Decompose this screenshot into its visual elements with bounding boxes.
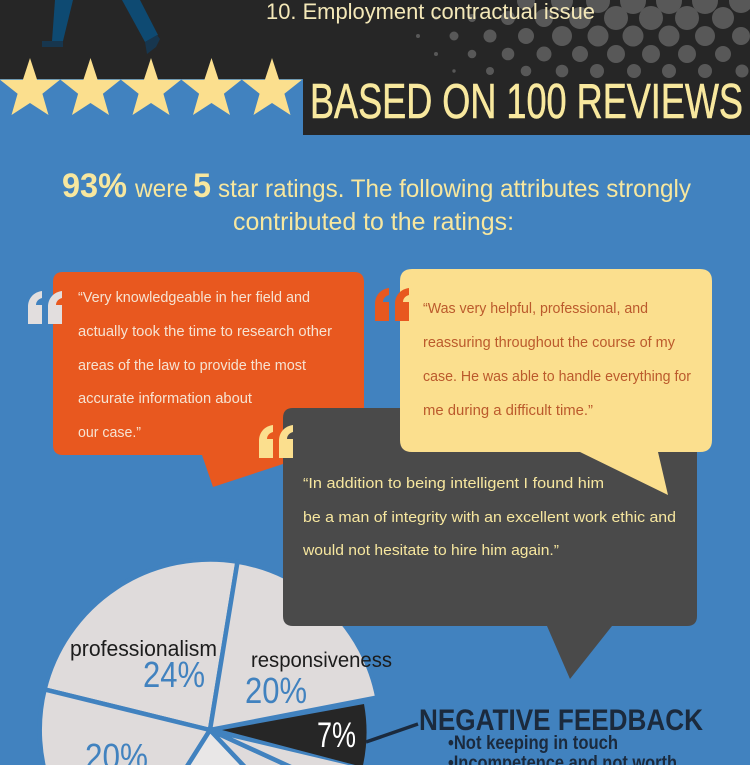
summary statement: contributed to the ratings: <box>233 208 514 236</box>
pie label: professionalism: professionalism <box>70 636 217 661</box>
pie chart <box>40 559 377 765</box>
speech bubble: yellow: me during a difficult time.” <box>423 402 593 419</box>
negative feedback block: NEGATIVE FEEDBACK <box>419 704 703 737</box>
icon: white quote mark <box>28 291 62 324</box>
five star rating <box>0 58 302 115</box>
speech bubble: grey: be a man of integrity with an excellent work ethic and <box>303 509 676 526</box>
summary statement: 5 <box>193 167 211 205</box>
summary statement: 93% <box>62 167 127 205</box>
speech bubble: orange <box>53 272 364 487</box>
speech bubble: orange: actually took the time to research other <box>78 323 332 340</box>
pie label: responsiveness <box>245 649 392 711</box>
speech bubble: yellow <box>400 269 712 495</box>
pie label: professionalism <box>70 636 217 695</box>
speech bubble: orange: “Very knowledgeable in her field and <box>78 289 310 306</box>
icon: yellow quote mark <box>259 425 293 458</box>
speech bubble: yellow: “Was very helpful, professional, and <box>423 300 648 317</box>
figure legs <box>42 0 160 54</box>
summary statement: star ratings. The following attributes strongly <box>218 175 691 203</box>
negative feedback block <box>419 704 703 765</box>
top dark banner <box>0 0 750 135</box>
pie label: professionalism: 24% <box>143 654 205 695</box>
summary statement <box>62 167 691 236</box>
pie label: 7 percent: 7% <box>317 716 356 755</box>
speech bubble: grey: would not hesitate to hire him again.” <box>302 542 559 559</box>
pie label: responsiveness: 20% <box>245 670 307 711</box>
halftone dot pattern <box>416 0 750 78</box>
speech bubble: grey <box>283 408 697 679</box>
speech bubble: yellow: reassuring throughout the course of my <box>423 334 675 351</box>
connector line to negative feedback <box>366 724 418 742</box>
pie slice: 7% negative <box>222 704 367 765</box>
speech bubble: orange: our case.” <box>78 424 141 441</box>
pie label: responsiveness: responsiveness <box>251 649 392 672</box>
speech bubble: grey: “In addition to being intelligent I found him <box>303 475 604 492</box>
speech bubble: orange: accurate information about <box>78 390 253 407</box>
summary statement: were <box>134 175 188 203</box>
negative feedback block: •Not keeping in touch <box>448 733 618 754</box>
speech bubble: orange: areas of the law to provide the most <box>78 357 307 374</box>
speech bubble: yellow: case. He was able to handle everything for <box>423 368 691 385</box>
icon: orange quote mark <box>375 288 409 321</box>
